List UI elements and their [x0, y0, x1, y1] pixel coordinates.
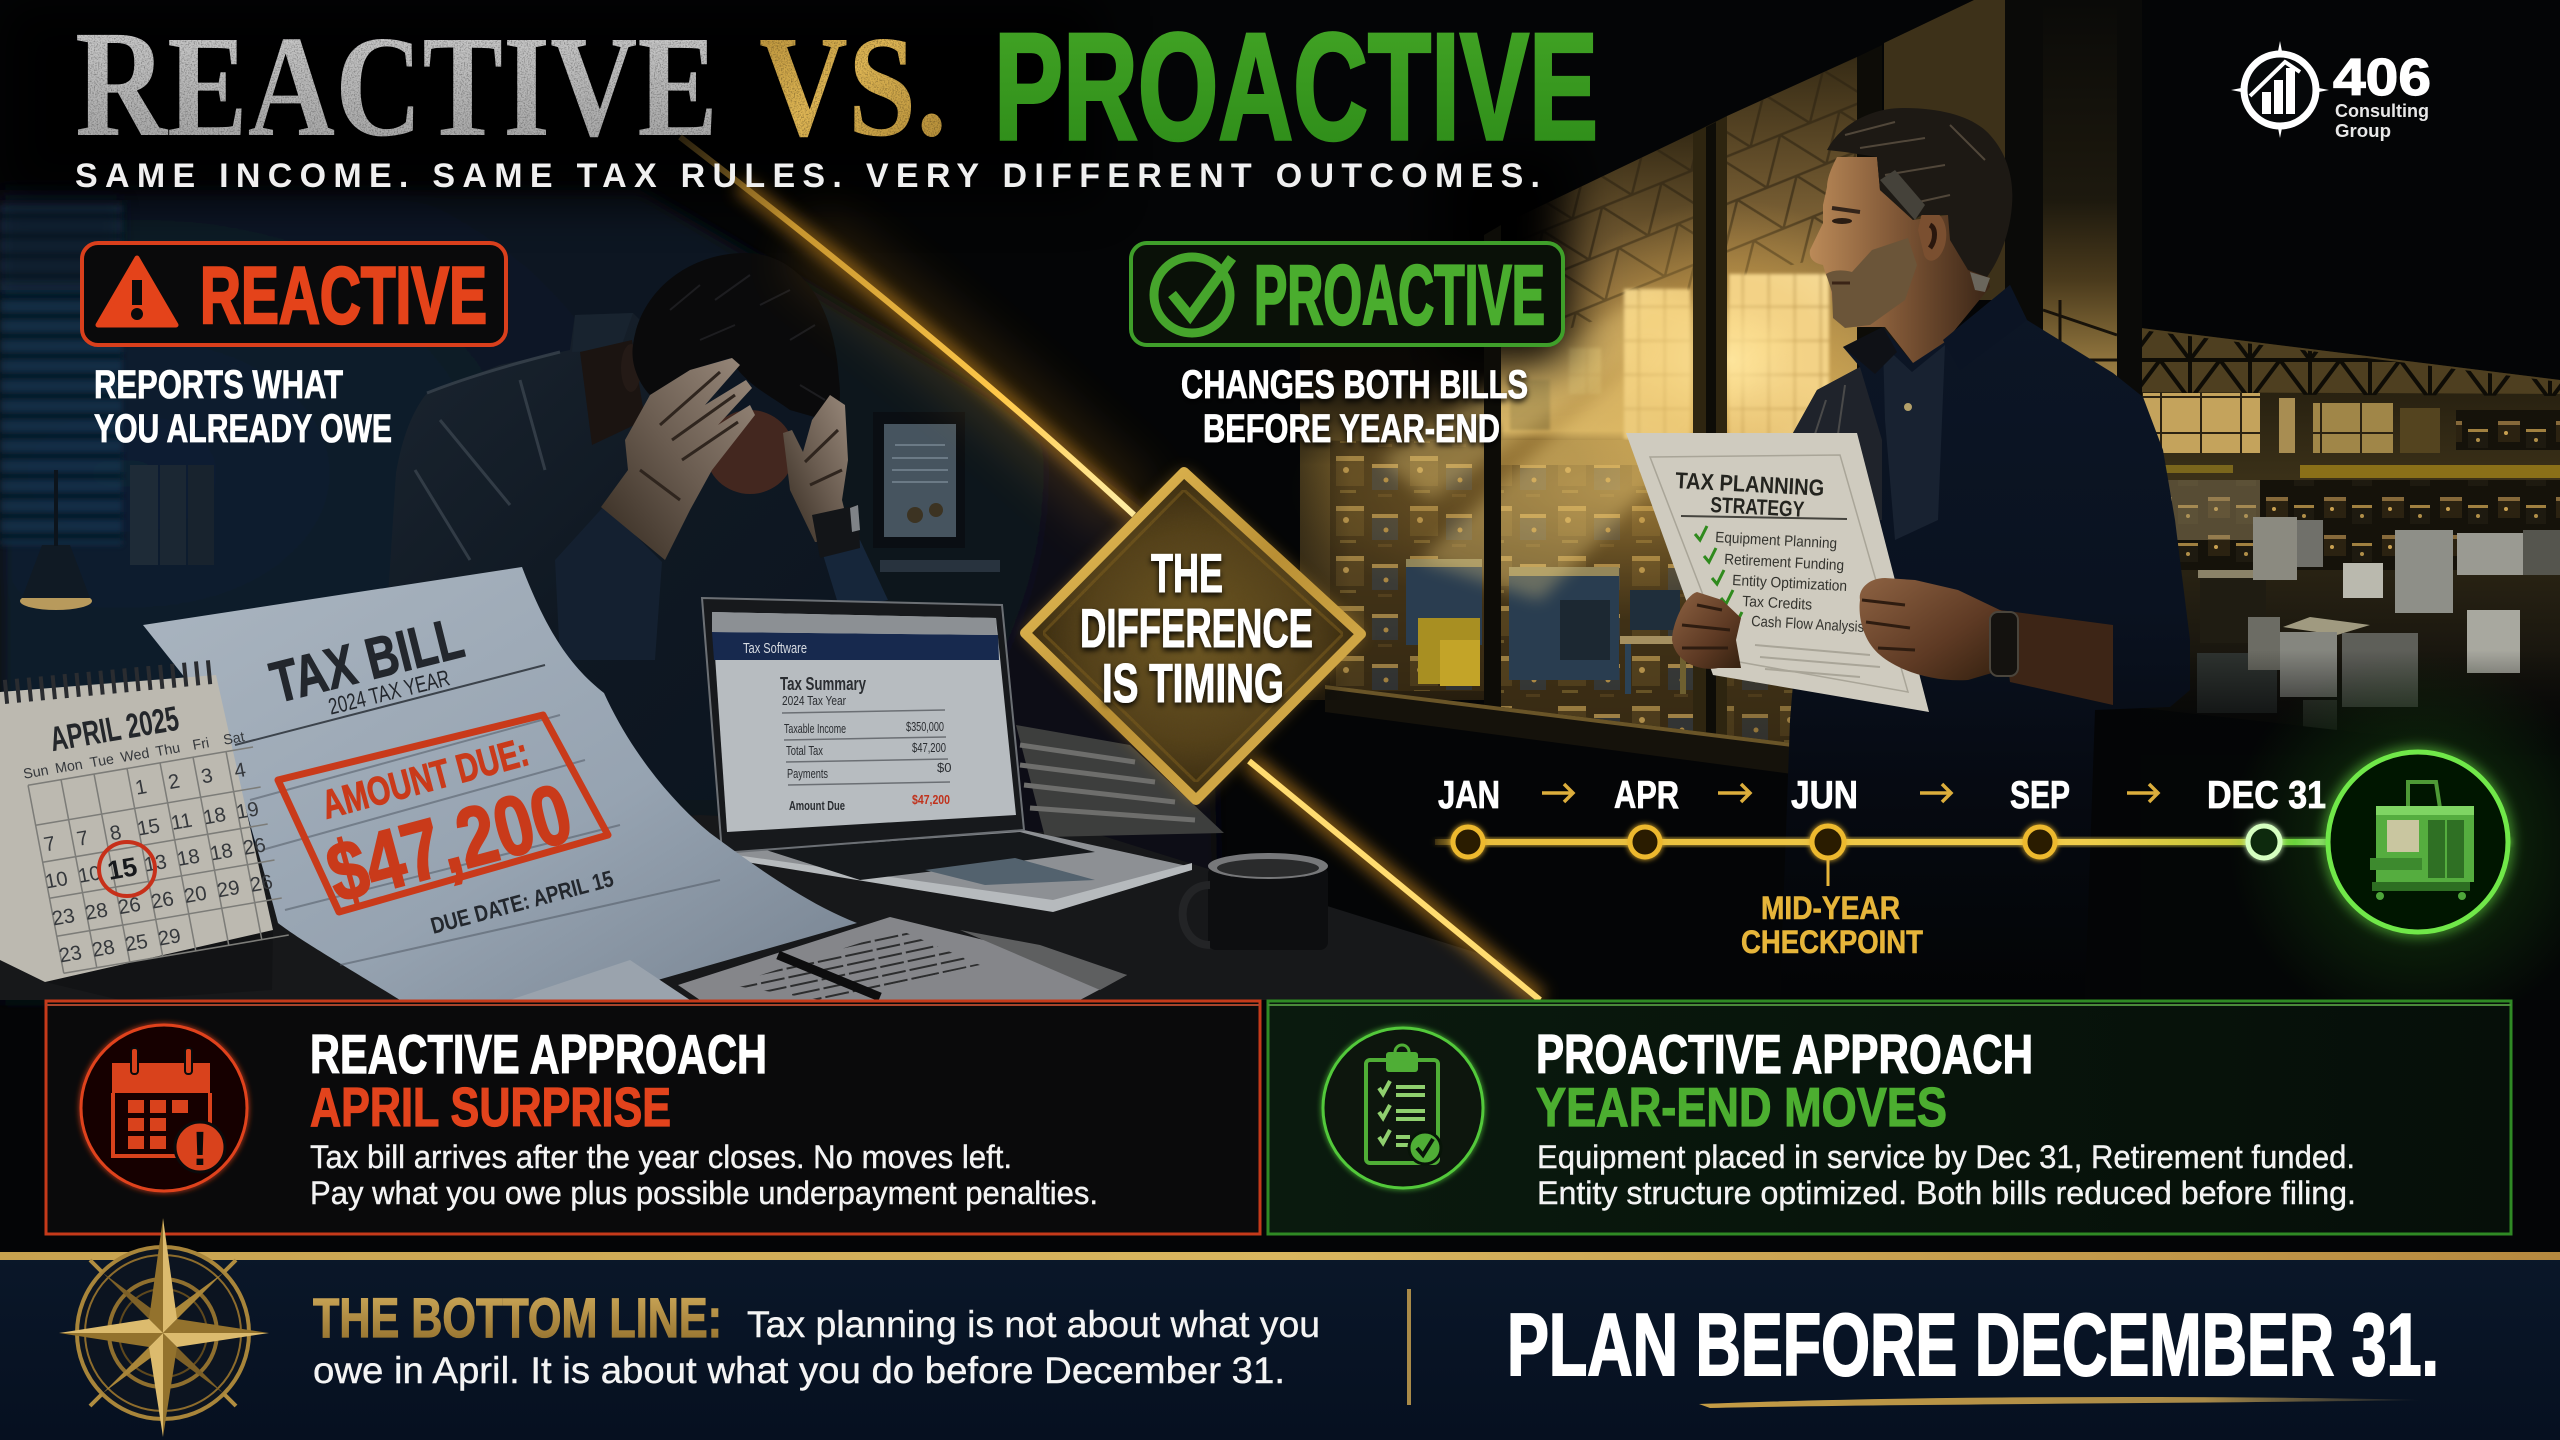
mid-year checkpoint: CHECKPOINT [1741, 924, 1923, 960]
upper pane C [1884, 0, 2005, 300]
panel: reactive approach: Pay what you owe plus possible underpayment penalties. [310, 1175, 1098, 1211]
panel: reactive approach: REACTIVE APPROACH [310, 1023, 767, 1085]
lit back windows [1510, 274, 1829, 439]
blue machines [1406, 559, 1690, 694]
bottom line statement [313, 1286, 1320, 1391]
equipment icon in glowing ring [2328, 752, 2508, 932]
timeline [1435, 652, 2560, 1032]
icon: calendar alert: ! [192, 1123, 208, 1176]
left hand [1672, 592, 1741, 669]
face [706, 410, 794, 494]
calendar: 29 [156, 925, 183, 951]
bottom line statement: owe in April. It is about what you do before December 31. [313, 1350, 1285, 1391]
calendar: 7 [75, 827, 90, 851]
month labels: JUN [1791, 774, 1858, 817]
subtitle: SAME INCOME. SAME TAX RULES. VERY DIFFERENT OUTCOMES. [75, 157, 1540, 195]
window sill [1325, 685, 1800, 775]
laptop screen text: Total Tax [786, 743, 823, 758]
laptop screen text: Taxable Income [784, 721, 846, 736]
calendar: 28 [90, 936, 117, 962]
left hand [601, 358, 755, 560]
checklist: Entity Optimization [1732, 572, 1848, 595]
panel: proactive approach: PROACTIVE APPROACH [1536, 1023, 2033, 1085]
sunlight glow [1540, 200, 1920, 520]
calendar [0, 672, 289, 1000]
sleeves [555, 505, 662, 660]
scene: factory windows [1220, 0, 2560, 1000]
calendar: 25 [123, 931, 150, 956]
calendar: 19 [234, 798, 261, 824]
calendar: 8 [108, 822, 123, 845]
logo: 406 Consulting Group [2231, 41, 2431, 141]
proactive badge: PROACTIVE [1254, 248, 1545, 342]
calendar: 29 [215, 877, 242, 902]
calendar: Fri [191, 735, 211, 754]
tax bill document [143, 567, 857, 1000]
calendar: 3 [199, 765, 215, 788]
calendar: 18 [175, 846, 202, 871]
panel: reactive approach: APRIL SURPRISE [310, 1076, 671, 1138]
strategy document: TAX PLANNING [1675, 467, 1825, 501]
desk papers and pen [678, 917, 1127, 1000]
panel: reactive approach: Tax bill arrives after the year closes. No moves left. [310, 1139, 1012, 1175]
panel: proactive approach [1268, 1001, 2511, 1234]
reactive description [94, 363, 392, 451]
laptop screen text: $0 [937, 760, 951, 775]
strategy document [1626, 433, 1929, 712]
proactive description: BEFORE YEAR-END [1203, 407, 1500, 451]
month labels: JAN [1438, 774, 1500, 817]
stamp: amount due: $47,200 [317, 765, 581, 920]
diamond badge [1023, 470, 1363, 802]
month labels [1438, 774, 2326, 817]
coat [1780, 285, 2190, 1000]
scene: reactive office background [0, 0, 1542, 1000]
window mullions [1484, 0, 2142, 780]
mid-year checkpoint [1741, 858, 1923, 960]
red circle on 15 [99, 842, 155, 896]
title word: reactive: REACTIVE [75, 0, 718, 169]
wrist watch [1990, 612, 2018, 676]
laptop screen text: $47,200 [912, 740, 946, 755]
hair [1827, 108, 2012, 277]
diamond text: IS TIMING [1102, 652, 1284, 714]
calendar: Thu [154, 740, 182, 760]
wrist watch [812, 505, 860, 558]
month labels: DEC 31 [2207, 774, 2326, 817]
mid-year checkpoint: MID-YEAR [1761, 890, 1900, 926]
calendar: 2 [166, 770, 182, 794]
tax bill document: DUE DATE: APRIL 15 [428, 865, 616, 939]
calendar: 15 [105, 851, 140, 886]
reactive badge: REACTIVE [200, 251, 487, 341]
neck and face [1810, 157, 1990, 363]
reactive description: YOU ALREADY OWE [94, 407, 392, 451]
diploma frame [873, 412, 965, 548]
calendar: 4 [232, 759, 248, 783]
calendar: APRIL 2025 [47, 700, 182, 759]
calendar: 26 [149, 888, 176, 914]
calendar: 10 [43, 868, 70, 893]
divider [1407, 1289, 1411, 1405]
month labels: APR [1614, 774, 1679, 817]
calendar: 23 [50, 905, 77, 930]
logo: 406 Consulting Group: Group [2335, 121, 2391, 141]
bottom line statement: Tax planning is not about what you [747, 1304, 1320, 1345]
calendar: Mon [54, 757, 84, 777]
proactive description: CHANGES BOTH BILLS [1181, 363, 1528, 407]
reactive description: REPORTS WHAT [94, 363, 343, 407]
icon: clipboard checklist [1323, 1028, 1483, 1188]
calendar: Sun [22, 763, 50, 783]
logo: 406 Consulting Group: 406 [2333, 49, 2431, 107]
paper stack [1016, 725, 1224, 837]
upper hall panes [1501, 133, 1693, 440]
laptop [702, 598, 1192, 912]
laptop screen text: 2024 Tax Year [782, 693, 847, 708]
factory floor machines [1330, 441, 1484, 691]
left pane [1300, 230, 1484, 700]
diamond text [1080, 542, 1313, 714]
proactive description [1181, 363, 1528, 451]
strategy document: STRATEGY [1710, 492, 1805, 522]
calendar: 20 [182, 883, 209, 908]
title word: proactive: PROACTIVE [994, 2, 1598, 172]
calendar: 28 [83, 899, 110, 925]
person: proactive man [1780, 108, 2190, 1000]
calendar: Sat [222, 729, 246, 749]
desk [0, 815, 1542, 1000]
checklist: Tax Credits [1742, 593, 1813, 614]
calendar: 1 [133, 776, 149, 800]
collar [1843, 327, 1897, 374]
reactive badge [82, 243, 506, 345]
calendar: 18 [208, 840, 235, 865]
laptop screen text: Payments [787, 766, 828, 781]
diamond text: DIFFERENCE [1080, 597, 1313, 659]
far hall windows [2143, 393, 2560, 453]
window blinds [0, 200, 122, 545]
calendar: Wed [119, 746, 151, 766]
binders on shelf [130, 465, 214, 565]
tax bill document: 2024 TAX YEAR [326, 664, 452, 720]
panel: proactive approach: Equipment placed in service by Dec 31, Retirement funded. [1537, 1139, 2355, 1175]
logo: 406 Consulting Group: Consulting [2335, 101, 2429, 121]
icon: gold compass [59, 1218, 269, 1437]
hair [632, 253, 840, 420]
right wide factory [2141, 328, 2560, 755]
calendar: Tue [89, 752, 115, 771]
jacket [384, 313, 886, 800]
diamond text: THE [1151, 542, 1223, 604]
right hand [1860, 578, 2004, 680]
checklist: Cash Flow Analysis [1751, 613, 1865, 636]
icon: check circle [1154, 257, 1232, 333]
laptop screen text: Tax Software [743, 640, 807, 657]
light rays [1380, 290, 1790, 600]
hands holding document [1672, 578, 2113, 705]
month labels: SEP [2010, 774, 2070, 817]
neck and ear [580, 340, 645, 445]
tax bill document: TAX BILL [264, 605, 470, 716]
stamp: amount due [278, 715, 608, 920]
calendar: 23 [57, 942, 84, 967]
laptop screen text: $47,200 [912, 792, 950, 807]
bottom band [0, 1252, 2560, 1440]
icon: calendar alert [81, 1025, 247, 1191]
forearm [2000, 610, 2113, 705]
icon: warning triangle [98, 258, 176, 325]
proactive badge [1131, 243, 1563, 345]
laptop screen text [743, 640, 951, 813]
right hand [783, 395, 852, 542]
bottom line statement: THE BOTTOM LINE: [313, 1286, 722, 1349]
calendar: 7 [42, 833, 57, 856]
calendar: 15 [135, 815, 162, 841]
laptop screen text: $350,000 [906, 719, 944, 734]
main title [75, 0, 1598, 172]
golden diagonal divider [680, 137, 1540, 1000]
laptop screen text: Amount Due [789, 798, 845, 813]
calendar: 18 [201, 804, 228, 829]
person: reactive man [384, 253, 888, 800]
dark haze over upper left pane [1440, 150, 1570, 360]
calendar: 10 [76, 862, 103, 888]
panel: proactive approach: YEAR-END MOVES [1536, 1076, 1947, 1138]
calendar: 11 [169, 810, 194, 835]
checklist: Retirement Funding [1724, 551, 1845, 574]
title word: vs: VS. [759, 7, 947, 167]
panel: proactive approach: Entity structure optimized. Both bills reduced before filing. [1537, 1175, 2356, 1211]
calendar: 13 [142, 851, 169, 877]
stamp: amount due: AMOUNT DUE: [317, 730, 533, 828]
calendar: 26 [241, 834, 268, 860]
checklist: Equipment Planning [1715, 529, 1838, 552]
pane D [2043, 0, 2117, 400]
timeline nodes [1453, 826, 2055, 858]
timeline line [1435, 839, 2510, 845]
arrows [1542, 784, 2158, 802]
floor light [1290, 360, 1950, 620]
shirt [1883, 345, 1945, 540]
coffee mug [1183, 853, 1328, 950]
grey cabinets [2197, 517, 2560, 740]
desk lamp [20, 470, 92, 610]
shelf ledge [880, 560, 1000, 572]
calendar: 26 [248, 871, 275, 897]
checklist [1695, 526, 1865, 636]
laptop screen text: Tax Summary [780, 674, 866, 694]
calendar: 26 [116, 894, 143, 919]
panel: reactive approach [46, 1001, 1260, 1234]
